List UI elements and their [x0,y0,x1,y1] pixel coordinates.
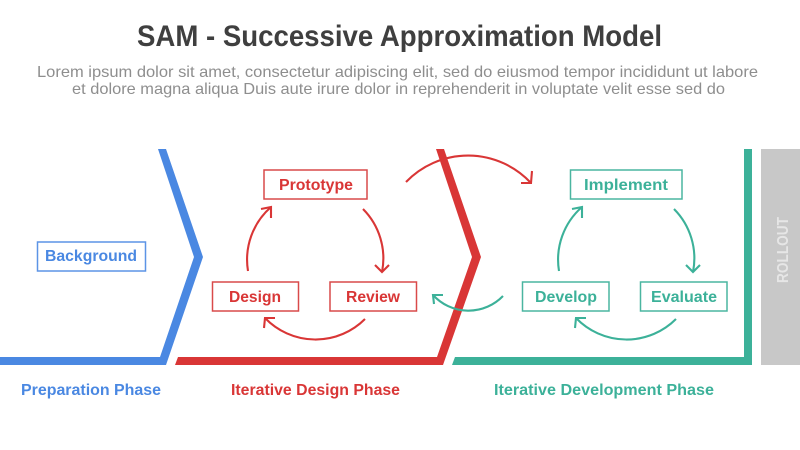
blue chevron frame [0,149,203,365]
title: SAM - Successive Approximation Model [137,20,662,53]
box: Review [330,282,416,311]
panel: preparation phase [0,149,203,399]
box: Implement [570,170,682,199]
box: Prototype: Prototype [279,177,353,194]
box: Evaluate: Evaluate [651,289,717,306]
box: Implement: Implement [584,177,668,194]
subtitle text [37,64,758,98]
box: Prototype [264,170,367,199]
box: Evaluate [640,282,727,311]
box: Design: Design [229,289,281,306]
arrow: evaluate to develop [575,318,676,340]
box: Design [212,282,298,311]
subtitle text: et dolore magna aliqua Duis aute irure dolor in reprehenderit in voluptate velit esse sed do [72,81,725,98]
arrow: design phase to development phase [406,156,532,183]
arrow: development phase back to design phase [433,295,503,311]
box: Develop: Develop [535,289,597,306]
panel: rollout [761,149,800,365]
arrow: prototype to review [363,209,389,272]
box: Review: Review [346,289,401,306]
label: Iterative Design Phase: Iterative Design Phase [231,382,400,399]
panel: iterative development phase [433,149,752,399]
red chevron frame [175,149,481,365]
arrow: review to design [264,318,365,340]
label: Preparation Phase: Preparation Phase [21,382,161,399]
box: Background [38,242,146,271]
box: Background: Background [45,248,137,265]
panel: rollout: ROLLOUT [775,217,792,283]
panel: iterative design phase [175,149,532,399]
arrow: implement to evaluate [674,209,700,272]
subtitle text: Lorem ipsum dolor sit amet, consectetur adipiscing elit, sed do eiusmod tempor incididunt ut labore [37,64,758,81]
arrow: design to prototype [247,207,271,271]
arrow: develop to implement [558,207,582,271]
box: Develop [522,282,609,311]
green frame [452,149,752,365]
label: Iterative Development Phase: Iterative Development Phase [494,382,714,399]
